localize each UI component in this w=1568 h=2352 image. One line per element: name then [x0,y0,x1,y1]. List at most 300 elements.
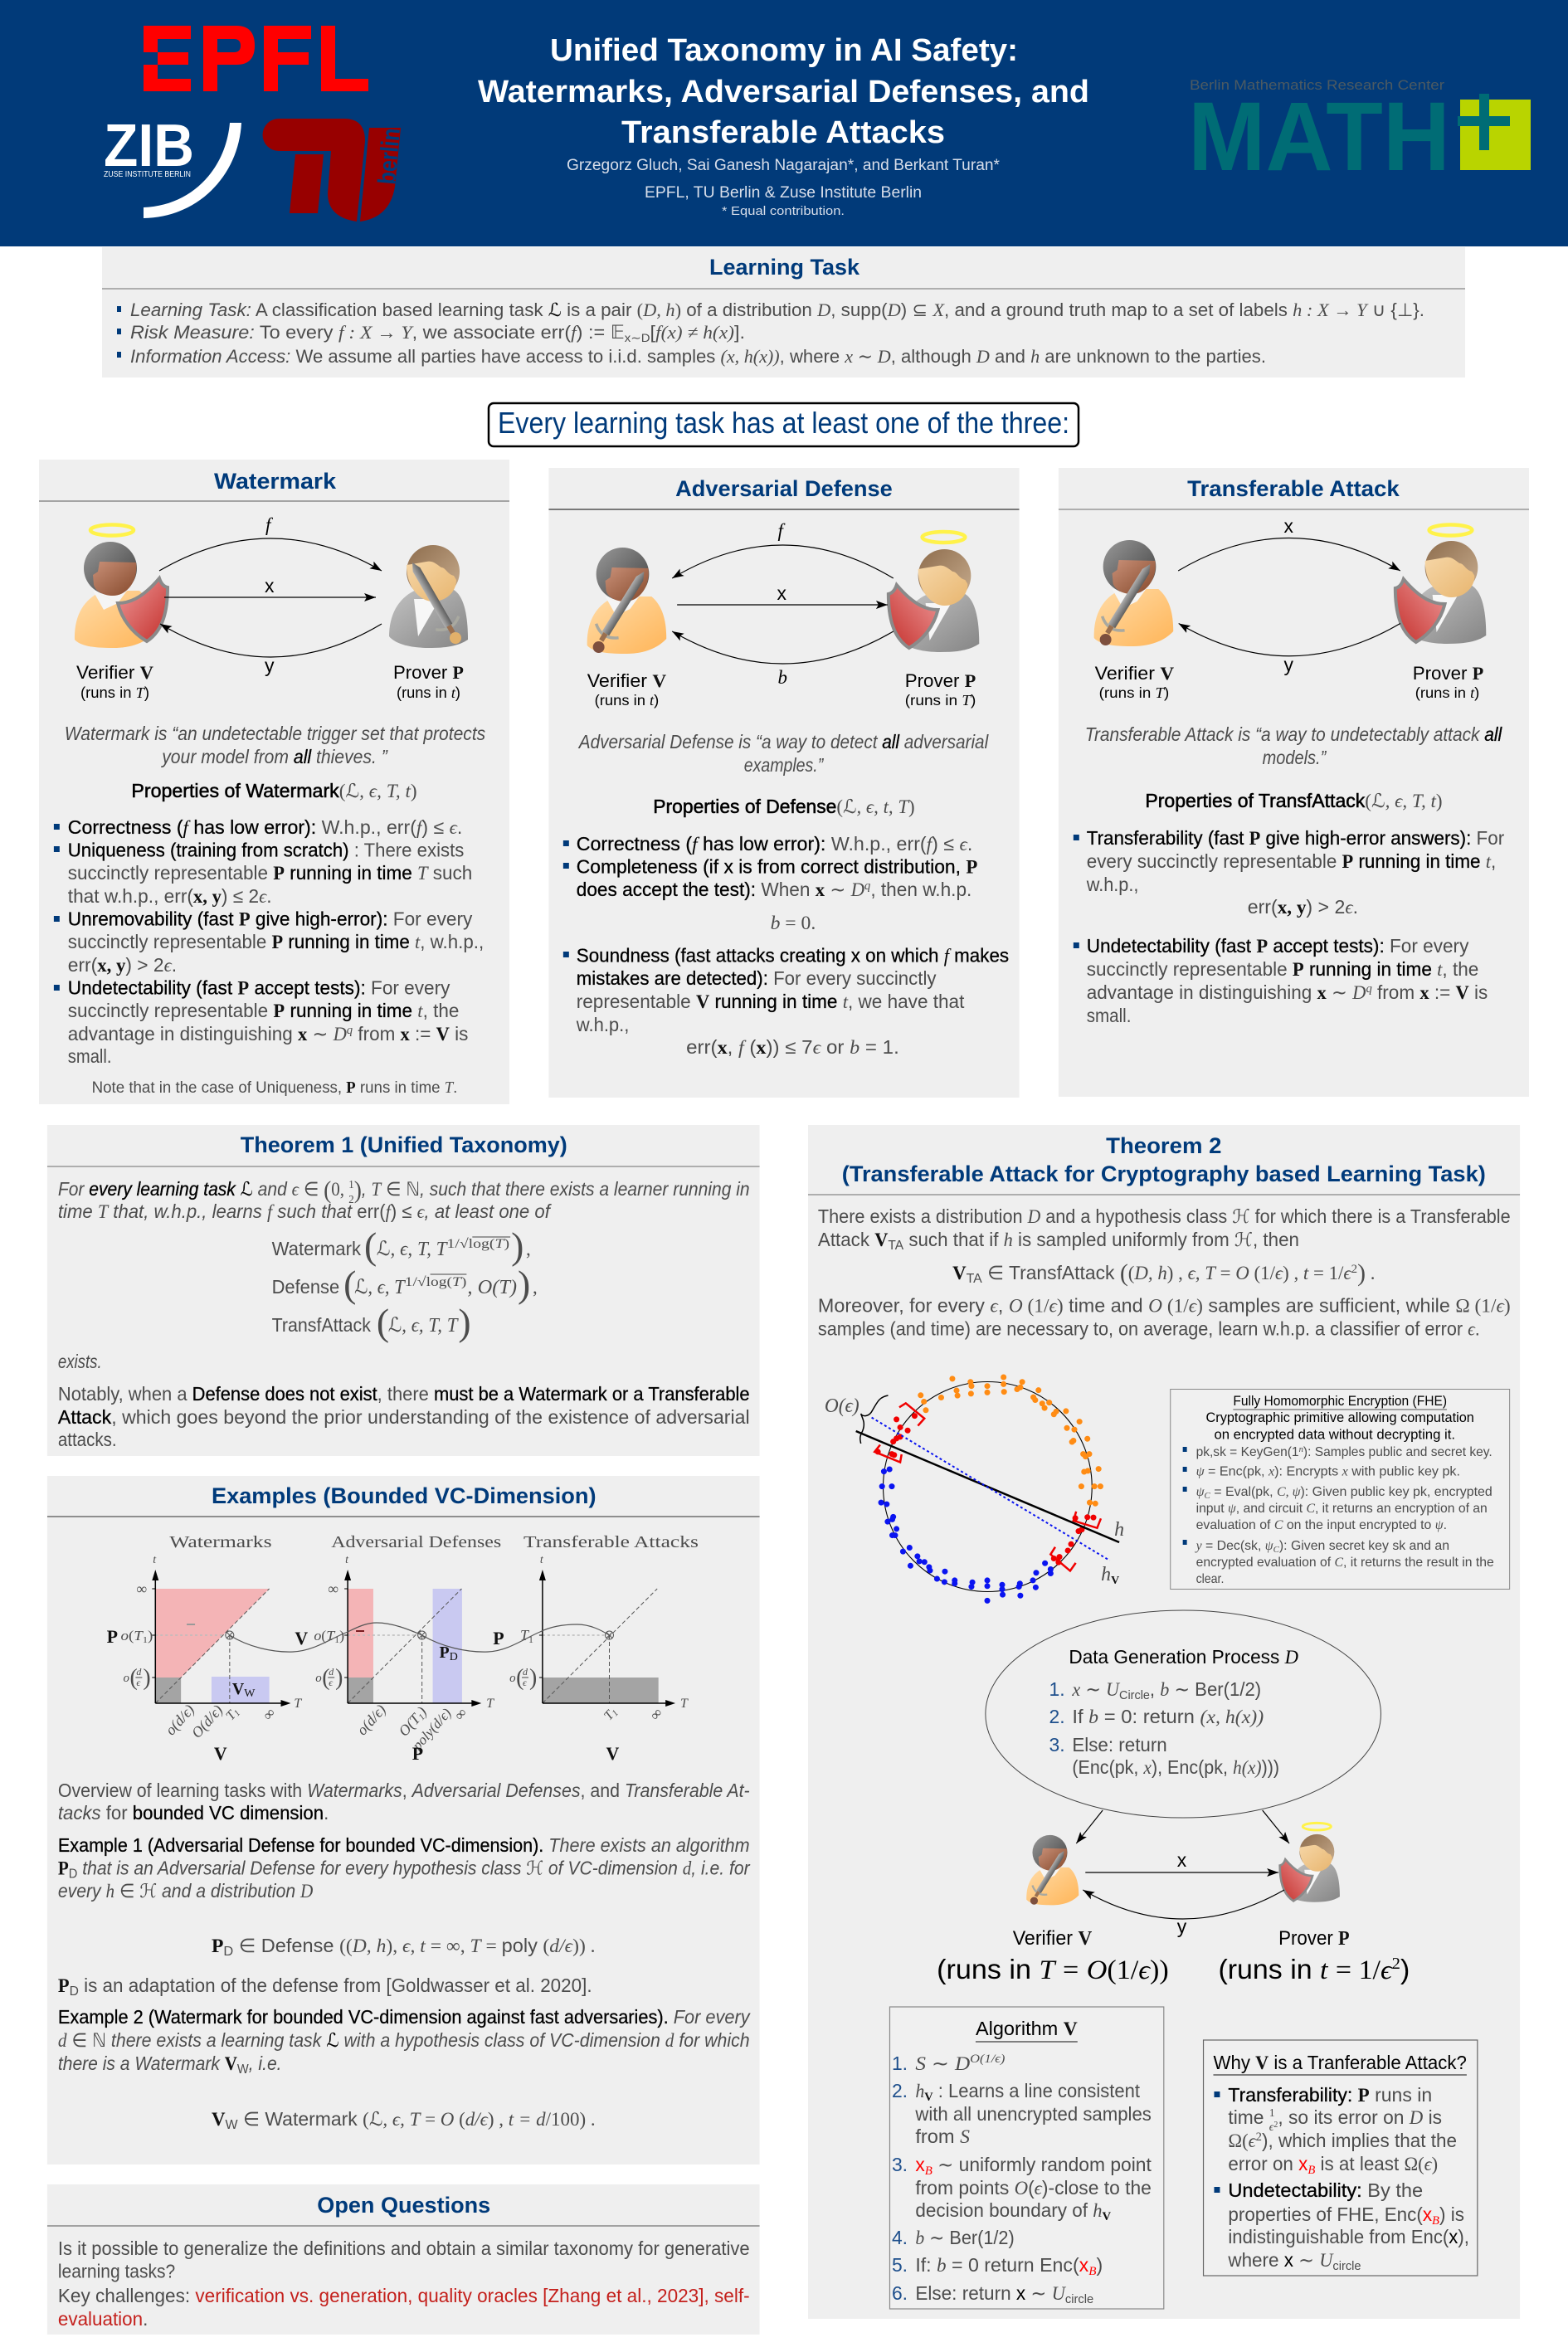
text: theorem 2 statement [818,1205,1511,1253]
diagram: circle decision boundary: h [1114,1519,1124,1541]
authors: * Equal contribution. [722,204,845,218]
chart: watermarks: V [214,1743,227,1764]
heading: watermark: Watermark [214,469,337,494]
diagram: defense protocol: f [778,520,786,541]
diagram: circle decision boundary: h [1101,1564,1111,1585]
text: theorem statement: T ∈ ℕ, such that there exists a learner running in [372,1178,782,1200]
ellipse: data generation process: 2. [1049,1706,1065,1727]
text: theorem statement: For every learning task ℒ and ϵ ∈ [58,1178,320,1200]
ellipse: data generation process: 3. [1049,1734,1065,1755]
title: Transferable Attacks [621,115,945,150]
equation: watermark [272,1225,531,1267]
text: example 1: that is an Adversarial Defense for every hypothesis class [77,1857,526,1879]
box: why V is a transferable attack: B [1432,2214,1439,2228]
authors: EPFL, TU Berlin & Zuse Institute Berlin [645,184,922,202]
list: attack properties: from [1372,981,1419,1003]
box: why V is a transferable attack: Ω(ϵ [1228,2130,1256,2151]
list: defense properties: Completeness (if x is from correct distribution, P [577,856,977,878]
chart: adversarial defenses [295,1533,501,1764]
box: why V is a transferable attack: 2 [1256,2130,1262,2144]
box: why V is a transferable attack: ), which implies that the [1262,2130,1457,2151]
curve: tradeoff line across charts [226,1623,613,1652]
diagram: watermark protocol [75,514,468,701]
equation: transfattack: TransfAttack [272,1314,371,1336]
text: example 2: , i.e. [249,2053,282,2074]
list: attack properties: Undetectability (fast P accept tests): For every [1087,935,1469,957]
box: fully homomorphic encryption: on encrypted data without decrypting it. [1214,1427,1455,1443]
diagram: circle decision boundary [825,1377,1124,1600]
box: why V is a transferable attack: ϵ [1269,2121,1275,2134]
text: defense quote: examples.” [744,754,824,776]
heading: open questions: Open Questions [317,2193,490,2218]
chart: transferable attacks [493,1533,699,1764]
box: algorithm V: 2. [892,2080,908,2101]
text: attack quote [1085,723,1502,768]
equation: transfattack membership: . [1366,1263,1375,1283]
list: defense properties: does accept the test): When x ∼ D [577,879,864,900]
equation: transfattack membership: D, h) , ϵ, T = O (1/ϵ) , t = 1/ϵ [1134,1263,1351,1283]
text: defense quote: Adversarial Defense is “a way to detect all adversarial [577,731,989,752]
box: algorithm V: decision boundary of h [915,2199,1103,2221]
ellipse: data generation process: , [1150,1678,1160,1700]
chart: transferable attacks: T [601,1708,617,1723]
chart: watermarks: 1 [143,1635,148,1645]
equation: transfattack membership: 2 [1351,1263,1357,1276]
logo: MATH+: MATH [1188,82,1450,192]
chart: adversarial defenses: O(T [395,1711,423,1740]
chart: watermarks: V [232,1680,244,1698]
equation: transfattack [272,1301,471,1343]
box: why V is a transferable attack: Undetectability: By the [1228,2179,1423,2201]
list: watermark properties: Uniqueness (training from scratch) : There exists [68,840,464,861]
box: algorithm V: from S [915,2126,971,2147]
text: overview [58,1780,750,1824]
diagram: watermark protocol: (runs in t) [397,684,460,701]
chart: watermarks: P [107,1626,118,1647]
text: example 1 [58,1834,751,1902]
box: why V is a transferable attack: Transferability: P runs in [1228,2084,1432,2106]
equation: defense: ℒ, ϵ, T [354,1277,406,1298]
text: example 1: D [69,1867,77,1882]
diagram: attack protocol: Prover P [1413,663,1483,684]
text: theorem statement: 0, [331,1179,348,1200]
box: why V is a transferable attack: error on x [1228,2153,1308,2174]
logo: EPFL [144,26,368,91]
text: theorem 2 statement: h is sampled uniformly from ℋ, then [1004,1229,1300,1250]
chart: adversarial defenses: o(d/ϵ) [353,1702,390,1739]
text: sample complexity: samples (and time) are necessary to, on average, learn w.h.p. a classifier of error ϵ. [818,1317,1480,1340]
heading: theorem 2: Theorem 2 [1106,1133,1221,1158]
box: fully homomorphic encryption: y = Dec(sk, ψ [1196,1539,1273,1553]
list: defense properties: , then w.h.p. [870,879,971,900]
diagram: circle decision boundary: V [1111,1575,1119,1587]
ellipse: data generation process: Data Generation Process D [1069,1646,1298,1668]
chart: adversarial defenses: Adversarial Defenses [331,1533,501,1551]
box: fully homomorphic encryption: clear. [1196,1572,1224,1586]
text: watermark quote: your model from all thieves. ” [160,746,388,767]
chart: watermarks: d [136,1666,141,1678]
diagram: watermark protocol: f [265,514,274,535]
list: attack properties: Transferability (fast P give high-error answers): For [1087,827,1505,849]
list: defense properties: mistakes are detected): For every succinctly [577,967,937,989]
text: theorem 2 statement: such that if [903,1229,1004,1250]
chart: adversarial defenses: 1 [416,1712,427,1722]
text: theorem 2 statement: Attack V [818,1229,889,1250]
text: information access: Information Access: We assume all parties have access to i.i.d. samples (x, h(x)), where x ∼ D, although D and h are unknown to the parties. [130,346,1266,367]
panel: transferable attack [1059,468,1529,1097]
heading: theorem 1: Theorem 1 (Unified Taxonomy) [241,1132,567,1157]
chart: watermarks: o [123,1672,129,1685]
chart: transferable attacks: d [523,1666,528,1678]
text: open questions body [58,2238,750,2330]
panel: examples [47,1476,760,2165]
equation: defense: , O(T) [467,1277,517,1298]
list: attack properties: x := V is [1419,981,1488,1003]
diagram: defense protocol: (runs in t) [595,692,659,709]
heading: theorem 2 [842,1133,1486,1186]
list: defense properties [563,833,1009,1058]
box: algorithm V: If: b = 0 return Enc(x [915,2254,1088,2276]
chart: adversarial defenses: poly(d/ϵ) [409,1705,455,1754]
authors: Grzegorz Gluch, Sai Ganesh Nagarajan*, and Berkant Turan* [567,157,1001,174]
chart: watermarks: 1 [232,1708,242,1718]
list: watermark properties: err(x, y) > 2ϵ. [68,954,177,976]
diagram: defense protocol: Prover P [905,670,976,691]
panel: watermark [39,460,509,1104]
equation: defense example: P [212,1936,223,1956]
list: watermark properties: advantage in distinguishing x ∼ D [68,1023,347,1045]
box: fully homomorphic encryption: Fully Homomorphic Encryption (FHE) [1233,1393,1447,1409]
title: Unified Taxonomy in AI Safety: [550,33,1018,68]
text: attack quote: Transferable Attack is “a way to undetectably attack all [1085,723,1502,745]
panel: open questions [47,2184,760,2335]
text: sample complexity: Moreover, for every ϵ, O (1/ϵ) time and O (1/ϵ) samples are sufficient, while Ω (1/ϵ) [818,1294,1511,1317]
chart: adversarial defenses: D [450,1651,458,1663]
list: watermark properties: small. [68,1045,112,1067]
subheading: properties of transfattack: Properties of TransfAttack(ℒ, ϵ, T, t) [1145,790,1443,811]
chart: watermarks: O(d/ϵ) [188,1702,226,1742]
ellipse: data generation process: (Enc(pk, x), Enc(pk, h(x)))) [1072,1756,1279,1778]
box: why V is a transferable attack: Ω(ϵ) [1404,2154,1438,2174]
chart: transferable attacks: T [680,1697,689,1711]
text: example 2: d ∈ ℕ there exists a learning task ℒ with a hypothesis class of VC-dimension d for which [58,2029,750,2051]
chart: watermarks: ∞ [136,1580,147,1597]
list: attack properties: every succinctly representable P running in time t, [1087,850,1496,872]
list: defense properties: Soundness (fast attacks creating x on which f makes [577,944,1009,967]
equation: defense example: D [223,1945,233,1959]
chart: watermarks [107,1533,302,1764]
text: risk measure: [ [650,322,655,343]
chart: adversarial defenses: ) [414,1703,431,1720]
logo: ZIB [104,113,241,218]
diagram: attack protocol: y [1284,654,1293,675]
logo: ZIB: ZIB [104,113,194,179]
text: example 2 [58,2006,751,2077]
text: theorem 2 statement: There exists a distribution D and a hypothesis class ℋ for which there is a Transferable [818,1205,1511,1227]
text: example 1: ℋ of VC-dimension d, i.e. for [526,1857,755,1879]
equation: watermark example: ∈ Watermark [238,2108,363,2130]
equation: transfattack membership: ∈ TransfAttack [982,1262,1120,1283]
text: adaptation note: D [70,1984,79,1999]
chart: transferable attacks: ∞ [646,1704,666,1723]
ellipse: data generation process: If b = 0: return (x, h(x)) [1072,1706,1264,1727]
box: algorithm V: V [924,2091,933,2104]
box: why V is a transferable attack: 1 [1269,2107,1275,2120]
text: example 2: Example 2 (Watermark for bounded VC-dimension against fast adversaries). For every [58,2006,751,2028]
list: defense properties: Correctness (f has low error): W.h.p., err(f) ≤ ϵ. [577,833,972,855]
text: notably [58,1383,750,1450]
box: algorithm V: 6. [892,2282,908,2304]
chart: transferable attacks: t [540,1554,544,1566]
chart: adversarial defenses: o [315,1672,322,1685]
list: attack properties: advantage in distinguishing x ∼ D [1087,981,1366,1003]
panel: theorem 2 [808,1125,1520,2319]
equation: transfattack: ) [458,1301,471,1343]
text: overview: Overview of learning tasks with Watermarks, Adversarial Defenses, and Transferable At- [58,1780,750,1801]
diagram: attack protocol: (runs in t) [1415,684,1479,701]
equation: watermark: 1/√log( T) [446,1237,509,1251]
list: watermark properties: succinctly representable P running in time t, w.h.p., [68,931,484,952]
box: fully homomorphic encryption: evaluation of C on the input encrypted to ψ. [1196,1518,1447,1532]
box: why V is a transferable attack: where x ∼ U [1228,2249,1333,2271]
box: why V is a transferable attack: ) is [1439,2203,1464,2225]
box: why V is a transferable attack: circle [1332,2259,1361,2273]
chart: watermarks: o(d/ϵ) [162,1702,198,1739]
box: fully homomorphic encryption: ): Given secret key sk and an [1279,1539,1449,1553]
box: fully homomorphic encryption: C, ψ): Given public key pk, encrypted [1277,1485,1492,1499]
chart: adversarial defenses: o(T [314,1628,334,1643]
text: defense quote [577,731,989,776]
list: watermark properties: from [353,1023,401,1045]
chart: adversarial defenses: ∞ [450,1704,470,1723]
diagram: theorem 2 protocol: 2 [1392,1955,1400,1973]
authors [567,157,1001,218]
diagram: watermark protocol: x [265,575,275,597]
box: algorithm V: circle [1065,2292,1093,2306]
text: example 2: there is a Watermark V [58,2053,238,2074]
diagram: theorem 2 protocol: (runs in T = O(1/ϵ)) [937,1954,1169,1985]
box: algorithm V: ∼ uniformly random point [933,2154,1152,2175]
chart: watermarks: ) [148,1628,153,1643]
diagram: defense protocol [587,520,979,709]
heading: learning task: Learning Task [709,255,860,280]
equation: watermark example: W [226,2118,238,2132]
panel: theorem 1 [47,1125,760,1456]
box: algorithm V: : Learns a line consistent [933,2080,1141,2101]
text: attack quote: models.” [1263,747,1327,768]
text: watermark quote [65,723,485,767]
diagram: defense protocol: Verifier V [587,670,666,691]
logo: ZIB: ZUSE INSTITUTE BERLIN [104,170,191,179]
box: fully homomorphic encryption: ): Samples public and secret key. [1303,1445,1493,1459]
box: algorithm V: b ∼ Ber(1/2) [915,2227,1015,2248]
equation: transfattack membership: ( [1128,1263,1134,1283]
text: theorem statement: 2 [348,1194,354,1206]
box: fully homomorphic encryption: pk,sk = KeyGen(1 [1196,1445,1301,1459]
equation: defense: , [533,1277,538,1298]
ellipse: data generation process: Else: return [1072,1734,1167,1755]
box: fully homomorphic encryption: C [1273,1545,1280,1555]
chart: transferable attacks: 1 [610,1708,621,1718]
text: theorem statement: time T that, w.h.p., learns f such that err(f) ≤ ϵ, at least one of [58,1200,552,1222]
chart: watermarks: ) [143,1665,151,1691]
list: defense properties: w.h.p., [576,1014,629,1035]
box: why V is a transferable attack: is at least [1315,2153,1404,2174]
diagram: theorem 2 protocol [937,1823,1410,1985]
title [478,33,1089,150]
diagram: theorem 2 protocol: x [1177,1849,1187,1871]
equation: defense: 1/√log( T) [405,1275,466,1289]
text: example 2: W [237,2062,249,2077]
text: example 1: Example 1 (Adversarial Defense for bounded VC-dimension). There exists an algorithm [58,1834,750,1856]
text: notably: Attack, which goes beyond the prior understanding of the existence of adversarial [58,1406,750,1428]
box: why V is a transferable attack [1204,2040,1478,2276]
diagram: watermark protocol: Prover P [393,662,464,683]
chart: adversarial defenses: V [295,1628,308,1648]
chart: transferable attacks: ϵ [523,1677,528,1688]
list: defense properties: q [864,879,871,893]
equation: transfattack membership: ( [1120,1259,1128,1287]
chart: adversarial defenses: 1 [334,1635,339,1645]
diagram: theorem 2 protocol: y [1177,1916,1187,1937]
diagram: theorem 2 protocol: ) [1400,1954,1410,1984]
list: watermark properties [54,816,484,1067]
box: algorithm V [889,2007,1164,2309]
chart: watermarks: T [294,1697,302,1711]
list: watermark properties: Correctness (f has low error): W.h.p., err(f) ≤ ϵ. [68,816,462,838]
box: algorithm V: ) [1096,2254,1103,2276]
chart: transferable attacks: 1 [528,1634,533,1645]
equation: watermark example: (ℒ, ϵ, T = O (d/ϵ) , t = d/100) . [363,2109,595,2130]
chart: adversarial defenses: T [486,1697,494,1711]
text: watermark quote: Watermark is “an undetectable trigger set that protects [65,723,485,744]
list: attack properties: q [1366,982,1372,996]
text: theorem statement: ( [324,1176,331,1204]
diagram: circle decision boundary: O(ϵ) [825,1395,859,1417]
ellipse: data generation process: x ∼ U [1072,1678,1120,1700]
list: watermark properties: succinctly representable P running in time T such [68,862,472,884]
text: overview: tacks for bounded VC dimension. [58,1802,329,1824]
box: algorithm V: Else: return x ∼ U [915,2282,1065,2304]
equation: watermark: ( [364,1225,377,1267]
arrows: data to parties [1076,1810,1289,1843]
text: notably: attacks. [58,1429,117,1450]
text: learning task definition: Learning Task: A classification based learning task ℒ is a pair (D, h) of a distribution D, supp(D) ⊆ X, and a ground truth map to a set of labels h : X → Y ∪ {⊥}. [130,299,1424,320]
panel: adversarial defense [548,468,1020,1098]
chart: transferable attacks: ) [529,1665,537,1691]
diagram: attack protocol [1094,515,1486,701]
box: algorithm V: x [915,2154,925,2175]
text: theorem statement: ) [354,1176,362,1204]
diagram: theorem 2 protocol: Verifier V [1013,1927,1092,1950]
list: watermark properties: succinctly representable P running in time t, the [68,1000,459,1021]
diagram: defense protocol: b [778,667,787,688]
heading: adversarial defense: Adversarial Defense [675,476,893,501]
subheading: properties of watermark: Properties of Watermark(ℒ, ϵ, T, t) [131,780,417,801]
diagram: attack protocol: (runs in T) [1099,684,1169,701]
equation: transfattack: ( [377,1301,389,1343]
text: risk measure: f(x) ≠ h(x) ]. [655,322,744,343]
chart: watermarks: ∞ [259,1704,279,1723]
callout: every learning task: Every learning task has at least one of the three: [498,406,1069,440]
panel: learning task [102,247,1465,377]
box: algorithm V: h [915,2081,924,2101]
logo: TU Berlin: berlin [373,127,406,186]
equation: defense [272,1263,538,1305]
chart: transferable attacks: ( [516,1665,523,1691]
equation: transfattack: ℒ, ϵ, T, T [388,1315,459,1337]
list: watermark properties: q [347,1024,353,1037]
list: watermark properties: x := V is [401,1023,469,1045]
equation: watermark: , [526,1239,531,1259]
diagram: watermark protocol: y [265,655,275,676]
box: why V is a transferable attack: B [1307,2164,1315,2177]
text: exists: exists. [58,1351,102,1372]
chart: watermarks: Watermarks [169,1533,272,1551]
box: why V is a transferable attack: 2 [1273,2121,1278,2130]
text: theorem 2 statement: TA [888,1239,903,1253]
text: theorem statement: 1 [348,1179,354,1191]
box: algorithm V: Algorithm V [976,2018,1078,2039]
box: fully homomorphic encryption [1171,1389,1510,1590]
chart: adversarial defenses: ∞ [328,1580,338,1597]
chart: transferable attacks: P [493,1628,504,1648]
chart: adversarial defenses: ) [339,1628,344,1643]
box: algorithm V: O(1/ϵ) [970,2053,1005,2066]
heading: theorem 2: (Transferable Attack for Cryptography based Learning Task) [842,1161,1486,1186]
text: adaptation note: is an adaptation of the defense from [Goldwasser et al. 2020]. [79,1975,592,1996]
equation: watermark: ) [511,1225,523,1267]
subheading: properties of defense: Properties of Defense(ℒ, ϵ, t, T) [653,796,915,817]
equation: transfattack membership: ) [1357,1259,1366,1287]
text: open questions body: Key challenges: verification vs. generation, quality oracles [Zhang et al., 2023], self- [58,2285,750,2306]
text: open questions body: learning tasks? [58,2261,175,2282]
box: fully homomorphic encryption: input ψ, and circuit C, it returns an encryption of an [1196,1502,1488,1516]
list: attack properties: succinctly representable P running in time t, the [1087,958,1478,980]
list: watermark properties: Unremovability (fast P give high-error): For every [68,908,473,930]
box: algorithm V: V [1103,2210,1111,2223]
list: watermark properties: Undetectability (fast P accept tests): For every [68,977,450,999]
chart: adversarial defenses: ) [335,1665,343,1691]
chart: transferable attacks: Transferable Attacks [523,1533,699,1551]
box: why V is a transferable attack: time [1228,2106,1264,2128]
ellipse: data generation process: b ∼ Ber(1/2) [1160,1678,1264,1700]
text: open questions body: evaluation. [58,2308,148,2330]
chart: transferable attacks: V [606,1743,619,1764]
box: algorithm V: B [1088,2265,1096,2278]
box: algorithm V: 5. [892,2254,908,2276]
text: sample complexity [818,1294,1511,1340]
box: why V is a transferable attack: indistinguishable from Enc(x), [1228,2226,1469,2247]
box: why V is a transferable attack: , so its error on [1278,2106,1410,2128]
header banner [0,0,1568,246]
list: attack properties: small. [1087,1005,1131,1026]
chart: adversarial defenses: ( [322,1665,330,1691]
box: fully homomorphic encryption: ψ [1196,1485,1205,1499]
box: fully homomorphic encryption: Cryptographic primitive allowing computation [1206,1410,1474,1425]
chart: adversarial defenses: d [329,1666,334,1678]
equation: transfattack membership: TA [967,1272,982,1286]
box: algorithm V: 1. [892,2053,908,2074]
chart: adversarial defenses: t [345,1554,349,1566]
text: notably: Notably, when a Defense does not exist, there must be a Watermark or a Transferable [58,1383,750,1405]
list: defense properties: b = 0. [771,913,816,933]
equation: watermark: Watermark [272,1238,362,1259]
diagram: watermark protocol: (runs in T) [80,684,149,701]
chart: watermarks: W [244,1687,256,1700]
box: algorithm V: from points O(ϵ)-close to the [915,2177,1152,2199]
box: algorithm V: 3. [892,2154,908,2175]
